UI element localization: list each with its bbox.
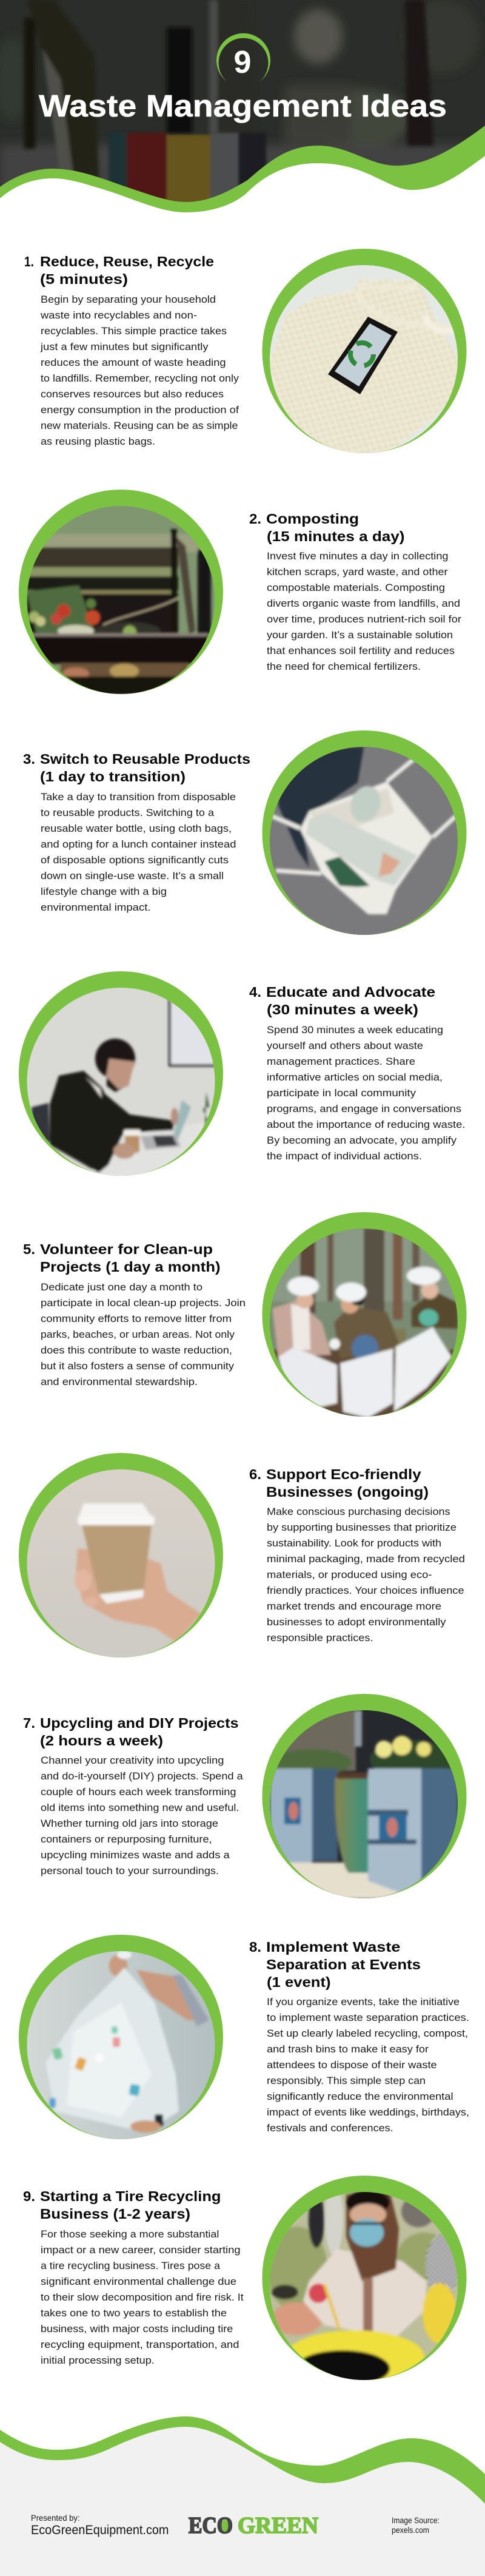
heading: [40, 1241, 221, 1275]
heading: [266, 511, 405, 544]
body text: of disposable options significantly cuts: [41, 855, 229, 866]
body text: Set up clearly labeled recycling, compost,: [267, 2028, 468, 2039]
body text: and opting for a lunch container instead: [41, 839, 236, 850]
panel: item 7: [23, 1694, 467, 1899]
body text: Channel your creativity into upcycling: [41, 1755, 224, 1766]
body text: the impact of individual actions.: [267, 1151, 422, 1162]
heading number: 7.: [23, 1715, 35, 1731]
photo frame 2: [19, 490, 223, 694]
body text: by supporting businesses that prioritize: [267, 1522, 457, 1533]
body text: couple of hours each week transforming: [41, 1787, 236, 1798]
heading: [266, 1466, 429, 1500]
body text: Begin by separating your household: [41, 294, 216, 305]
heading: Support Eco-friendly: [266, 1466, 421, 1482]
footer: image source: pexels.com: [392, 2526, 429, 2535]
body text: that enhances soil fertility and reduces: [267, 646, 455, 656]
header wave: green band: [0, 126, 485, 231]
heading: Reduce, Reuse, Recycle: [40, 254, 214, 269]
heading: Businesses (ongoing): [266, 1484, 429, 1500]
heading: Implement Waste: [266, 1939, 400, 1955]
heading: Educate and Advocate: [266, 984, 435, 1000]
heading: (15 minutes a day): [267, 528, 405, 544]
heading: [266, 1939, 421, 1990]
body text: businesses to adopt environmentally: [267, 1617, 446, 1628]
body text: but it also fosters a sense of community: [41, 1361, 235, 1372]
heading: [40, 254, 214, 287]
panel: item 9: [23, 2176, 467, 2387]
body text: environmental impact.: [41, 902, 151, 913]
panel: item 5: [23, 1212, 467, 1420]
heading: [266, 984, 435, 1017]
body text: over time, produces nutrient-rich soil for: [267, 614, 462, 625]
body text: Spend 30 minutes a week educating: [267, 1025, 443, 1036]
body text: [267, 551, 462, 672]
body text: responsible practices.: [267, 1633, 373, 1644]
body text: parks, beaches, or urban areas. Not only: [41, 1329, 235, 1340]
body text: about the importance of reducing waste.: [267, 1119, 466, 1130]
heading: Business (1-2 years): [40, 2206, 190, 2222]
photo: woman painting yellow tire: [270, 2192, 458, 2380]
heading: [40, 2188, 221, 2222]
body text: [267, 1997, 469, 2134]
body text: diverts organic waste from landfills, and: [267, 598, 460, 609]
body text: friendly practices. Your choices influence: [267, 1585, 464, 1596]
body text: [41, 2229, 244, 2366]
body text: informative articles on social media,: [267, 1072, 443, 1083]
photo: hand holding kraft coffee cup: [27, 1469, 215, 1657]
body text: reduces the amount of waste heading: [41, 357, 226, 368]
heading: Volunteer for Clean-up: [40, 1241, 213, 1257]
title number: 9: [234, 45, 251, 80]
body text: [40, 294, 239, 447]
footer: image source: [392, 2516, 440, 2535]
body text: lifestyle change with a big: [41, 886, 167, 897]
body text: compostable materials. Composting: [267, 582, 445, 593]
heading number: 9.: [23, 2188, 35, 2204]
footer: presenter: Presented by:: [31, 2514, 80, 2523]
body text: initial processing setup.: [41, 2355, 155, 2366]
footer: Eco Green logo: [189, 2513, 318, 2538]
body text: takes one to two years to establish the: [41, 2308, 227, 2319]
body text: sustainability. Look for products with: [267, 1538, 441, 1549]
heading: (2 hours a week): [40, 1733, 163, 1748]
body text: old items into something new and useful.: [41, 1802, 239, 1813]
photo frame 8: [19, 1935, 223, 2139]
heading: (1 event): [267, 1974, 331, 1990]
heading: Switch to Reusable Products: [40, 751, 250, 767]
body text: For those seeking a more substantial: [41, 2229, 219, 2240]
body text: waste into recyclables and non-: [40, 310, 197, 321]
body text: market trends and encourage more: [267, 1601, 441, 1612]
body text: Make conscious purchasing decisions: [267, 1506, 450, 1517]
body text: reusable water bottle, using cloth bags,: [41, 823, 232, 834]
body text: minimal packaging, made from recycled: [267, 1554, 465, 1565]
heading: Composting: [266, 511, 359, 527]
body text: kitchen scraps, yard waste, and other: [267, 567, 448, 578]
body text: new materials. Reusing can be as simple: [41, 420, 238, 431]
heading: Upcycling and DIY Projects: [40, 1715, 239, 1731]
body text: and do-it-yourself (DIY) projects. Spend a: [41, 1771, 244, 1782]
panel: item 8: [19, 1935, 469, 2139]
heading number: 6.: [249, 1466, 261, 1482]
panel: item 6: [19, 1453, 465, 1657]
body text: responsibly. This simple step can: [267, 2075, 426, 2086]
body text: Take a day to transition from disposable: [41, 792, 236, 803]
body text: Invest five minutes a day in collecting: [267, 551, 449, 562]
photo frame 1: [262, 249, 467, 453]
body text: festivals and conferences.: [267, 2123, 393, 2134]
body text: impact or a new career, consider starting: [41, 2245, 241, 2256]
photo frame 6: [19, 1453, 223, 1657]
footer: image source: Image Source:: [392, 2516, 440, 2525]
photo: phone on net bag: [270, 265, 458, 453]
body text: conserves resources but also reduces: [41, 389, 224, 400]
body text: personal touch to your surroundings.: [41, 1866, 219, 1876]
photo: tote bag with glass jars: [270, 747, 458, 935]
body text: to reusable products. Switching to a: [41, 808, 215, 818]
photo: man at laptop: [27, 988, 217, 1177]
heading: Starting a Tire Recycling: [40, 2188, 221, 2204]
body text: business, with major costs including tire: [41, 2324, 233, 2335]
body text: participate in local clean-up projects. Join: [41, 1298, 246, 1309]
body text: By becoming an advocate, you amplify: [267, 1135, 457, 1146]
body text: a tire recycling business. Tires pose a: [41, 2261, 221, 2271]
panel: item 2: [19, 490, 462, 695]
photo: volunteers cleaning forest: [270, 1229, 458, 1420]
heading number: 4.: [249, 984, 261, 1000]
footer: Eco Green logo: ECO: [189, 2513, 233, 2538]
footer background: [0, 2427, 485, 2576]
body text: programs, and engage in conversations: [267, 1104, 461, 1114]
body text: containers or repurposing furniture,: [41, 1834, 212, 1845]
body text: attendees to dispose of their waste: [267, 2060, 437, 2071]
body text: significant environmental challenge due: [41, 2276, 236, 2287]
heading: (30 minutes a week): [267, 1002, 418, 1017]
body text: materials, or produced using eco-: [267, 1570, 432, 1580]
body text: just a few minutes but significantly: [40, 342, 209, 352]
footer: presenter: [31, 2514, 169, 2537]
photo: clear bag of plastic bottles: [27, 1951, 215, 2139]
body text: [41, 792, 236, 913]
body text: and trash bins to make it easy for: [267, 2044, 429, 2055]
photo frame 4: [19, 971, 223, 1176]
photo frame 9: [262, 2176, 467, 2380]
heading number: 5.: [23, 1241, 35, 1257]
body text: down on single-use waste. It’s a small: [41, 871, 224, 882]
header wave: white edge: [0, 156, 485, 237]
photo frame 5: [262, 1212, 467, 1417]
body text: management practices. Share: [267, 1056, 415, 1067]
title: Waste Management Ideas: [39, 89, 447, 123]
heading number: 2.: [249, 511, 261, 527]
body text: [41, 1282, 246, 1387]
body text: to landfills. Remember, recycling not only: [41, 373, 239, 384]
heading: (5 minutes): [40, 271, 128, 287]
body text: participate in local community: [267, 1088, 416, 1099]
body text: to implement waste separation practices.: [267, 2012, 469, 2023]
photo frame 3: [262, 730, 467, 935]
body text: [267, 1506, 465, 1644]
footer wave: green band: [0, 2416, 485, 2512]
body text: does this contribute to waste reduction,: [41, 1345, 232, 1356]
heading: [40, 1715, 239, 1748]
body text: yourself and others about waste: [267, 1040, 423, 1051]
panel: item 4: [19, 971, 466, 1177]
footer: presenter: EcoGreenEquipment.com: [31, 2523, 169, 2537]
body text: [41, 1755, 244, 1876]
photo: upcycled pallet planters: [270, 1710, 458, 1899]
footer: Eco Green logo: GREEN: [238, 2513, 318, 2538]
body text: [267, 1025, 466, 1162]
body text: as reusing plastic bags.: [41, 436, 155, 447]
photo frame 7: [262, 1694, 467, 1898]
body text: recyclables. This simple practice takes: [41, 326, 227, 337]
body text: your garden. It’s a sustainable solution: [267, 630, 453, 641]
photo: compost bin: [27, 506, 215, 695]
body text: community efforts to remove litter from: [41, 1313, 232, 1324]
body text: Whether turning old jars into storage: [41, 1818, 218, 1829]
body text: the need for chemical fertilizers.: [267, 661, 421, 672]
body text: energy consumption in the production of: [41, 405, 239, 416]
body text: to their slow decomposition and fire risk. It: [41, 2292, 244, 2303]
body text: upcycling minimizes waste and adds a: [41, 1850, 230, 1861]
body text: recycling equipment, transportation, and: [41, 2339, 239, 2350]
heading number: 8.: [249, 1939, 261, 1955]
heading: Separation at Events: [266, 1957, 421, 1972]
panel: item 1: [24, 249, 467, 453]
body text: significantly reduce the environmental: [267, 2091, 453, 2102]
icon: number crescent arc: [216, 33, 270, 82]
panel: item 3: [23, 730, 467, 935]
heading: (1 day to transition): [40, 769, 186, 784]
heading: [40, 751, 250, 784]
heading number: 3.: [23, 751, 35, 767]
heading: Projects (1 day a month): [40, 1259, 221, 1275]
body text: and environmental stewardship.: [41, 1377, 198, 1387]
body text: If you organize events, take the initiative: [267, 1997, 460, 2008]
header background photo: forest with recycling bins: [0, 0, 485, 218]
heading number: 1.: [24, 254, 34, 269]
body text: Dedicate just one day a month to: [41, 1282, 202, 1293]
body text: impact of events like weddings, birthdays,: [267, 2107, 469, 2118]
